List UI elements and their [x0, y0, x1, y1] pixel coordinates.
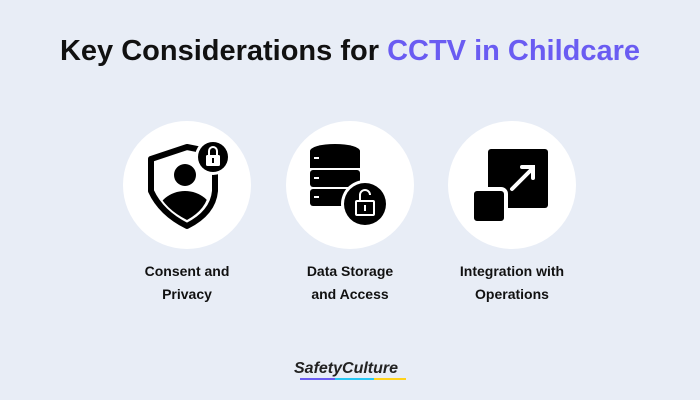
- label: Consent and: [145, 263, 229, 279]
- icon: expand squares: [448, 121, 576, 249]
- label: Privacy: [162, 286, 212, 302]
- label: [460, 263, 564, 302]
- icon: database unlock: [286, 121, 414, 249]
- title: Key Considerations for CCTV in Childcare: [60, 35, 640, 67]
- label: Operations: [475, 286, 549, 302]
- label: Integration with: [460, 263, 564, 279]
- panel: integration: [448, 121, 576, 302]
- panel: data storage: [286, 121, 414, 302]
- logo: SafetyCulture: [294, 360, 398, 377]
- label: and Access: [311, 286, 389, 302]
- label: [145, 263, 229, 302]
- icon: shield person lock: [123, 121, 251, 249]
- panel: consent: [123, 121, 251, 302]
- label: [307, 263, 393, 302]
- label: Data Storage: [307, 263, 393, 279]
